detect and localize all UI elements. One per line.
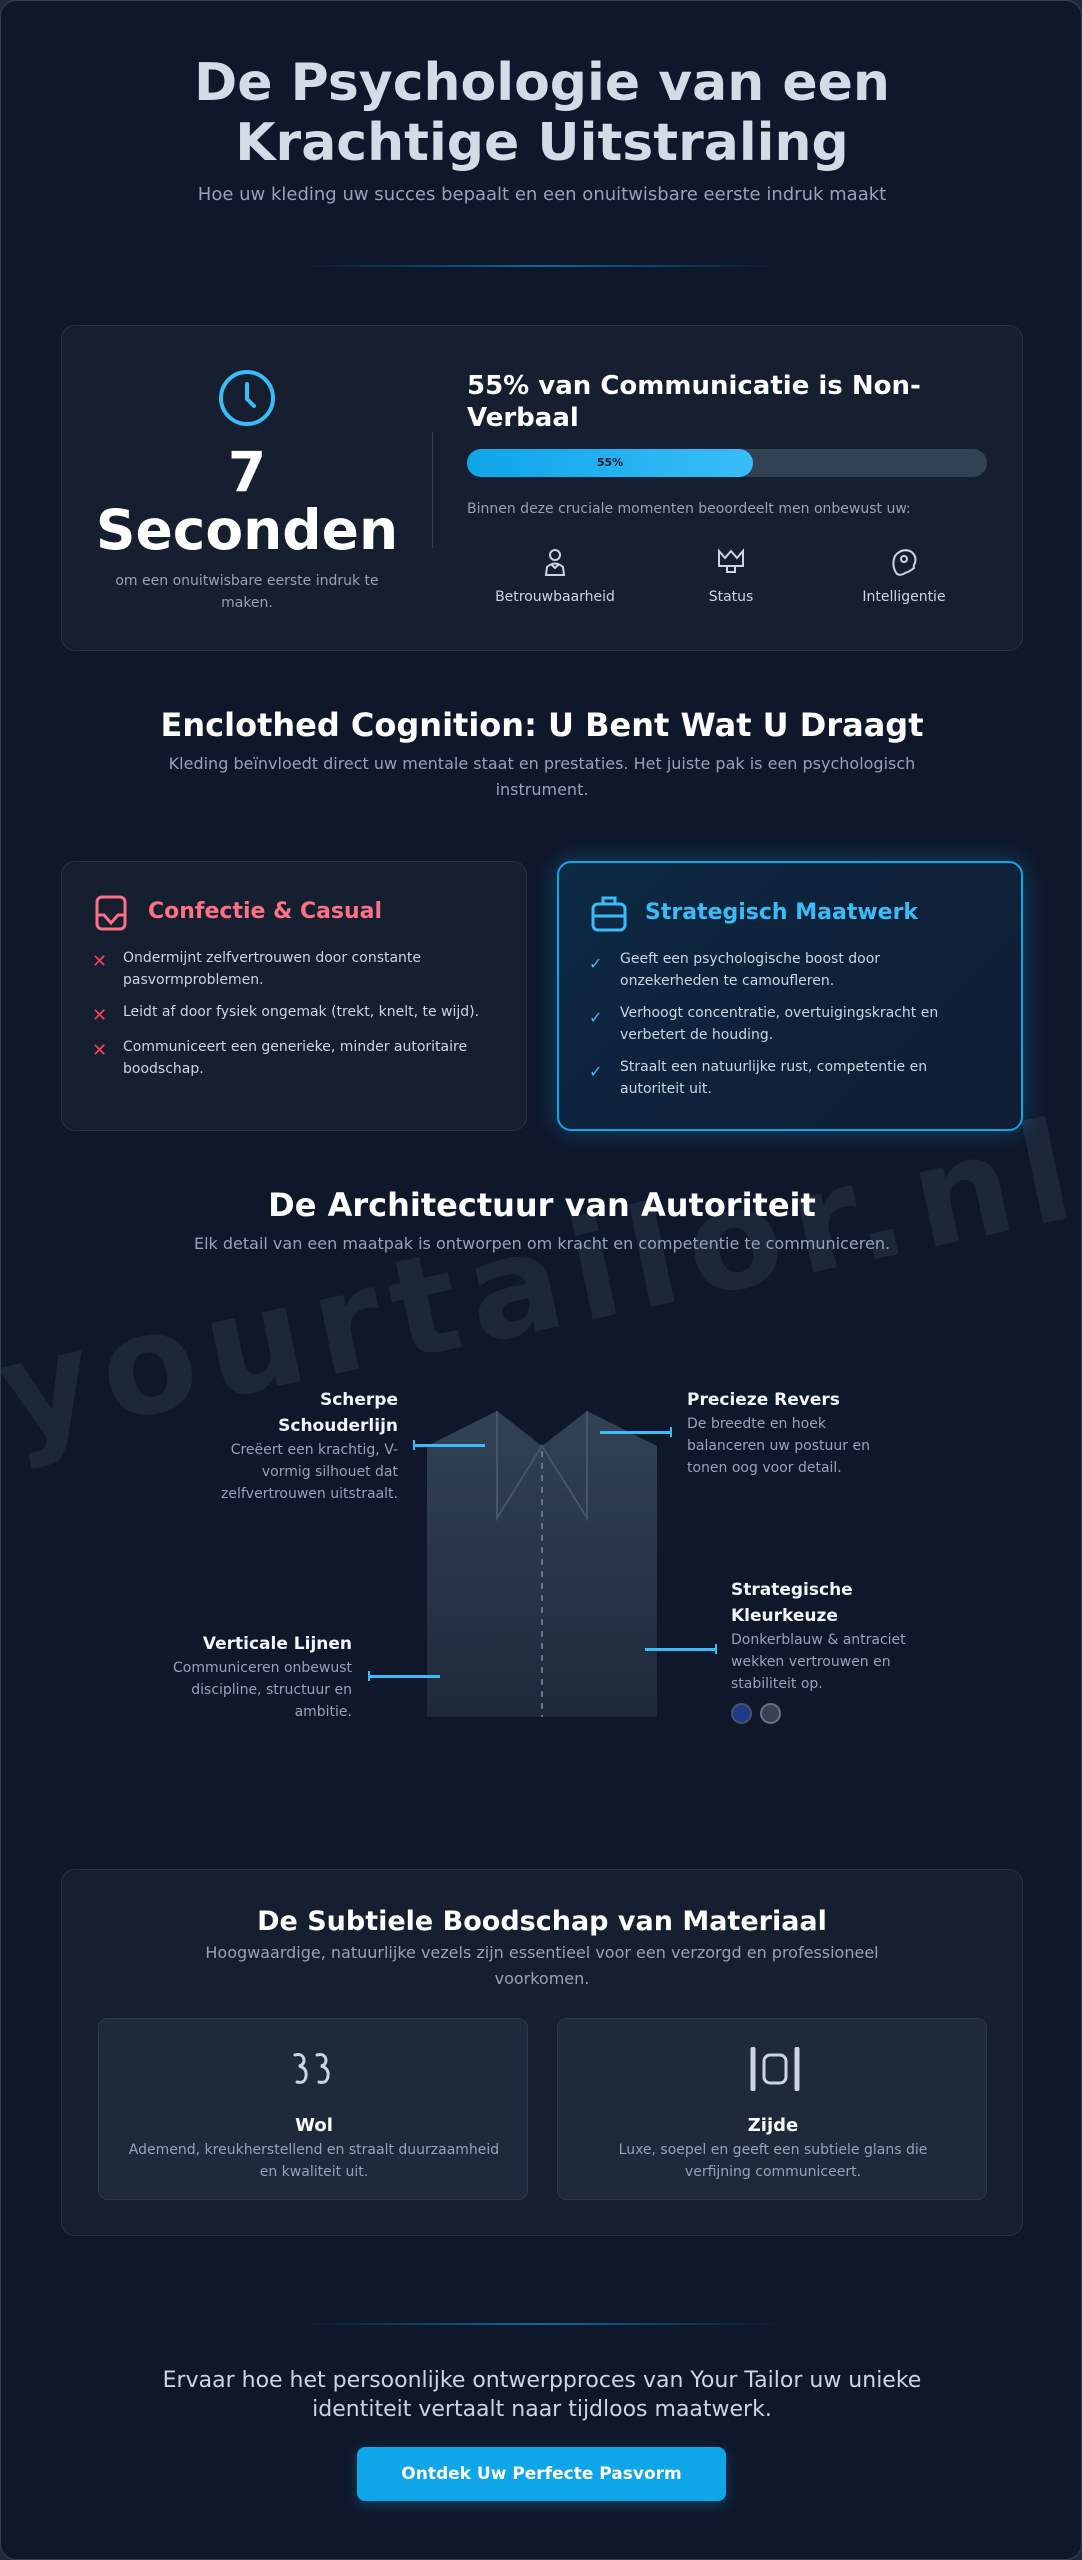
progress bar xyxy=(467,449,987,477)
card: wol: Ademend, kreukherstellend en straalt duurzaamheid xyxy=(129,2142,499,2158)
callout: verticale lijnen: Communiceren onbewust discipline, structuur en ambitie. xyxy=(173,1660,352,1720)
callout: schouderlijn: Creëert een krachtig, V-vormig silhouet dat zelfvertrouwen uitstraalt. xyxy=(221,1442,398,1502)
card title: Strategisch Maatwerk xyxy=(645,900,918,925)
icon group: traits: Betrouwbaarheid xyxy=(495,589,615,605)
color swatches xyxy=(731,1703,781,1724)
heading: architectuur: De Architectuur van Autoriteit xyxy=(268,1186,816,1224)
icon: wool xyxy=(294,2053,330,2084)
bullets: ✓ xyxy=(589,1062,602,1081)
callout: schouderlijn: Scherpe xyxy=(320,1390,398,1410)
title: De Psychologie van een xyxy=(194,53,890,113)
panel: first impression xyxy=(61,325,1023,651)
card: wol: Wol xyxy=(295,2115,333,2136)
text: enclothed subtitle: Kleding beïnvloedt direct uw mentale staat en prestaties. Het juiste pak is een psychologisch instrument. xyxy=(169,754,915,799)
callout: schouderlijn xyxy=(221,1390,398,1502)
caption: om een onuitwisbare eerste indruk te maken. xyxy=(115,573,379,611)
icon: briefcase xyxy=(592,896,626,932)
icon: trust xyxy=(544,549,566,576)
icon group: traits xyxy=(495,548,946,605)
callout: revers: Precieze Revers xyxy=(687,1390,840,1410)
callout: verticale lijnen xyxy=(173,1634,352,1720)
bullets: Straalt een natuurlijke rust, competentie en autoriteit uit. xyxy=(620,1059,927,1097)
progress bar: 55% xyxy=(597,456,623,469)
card: wol xyxy=(98,2018,528,2200)
stat: 7 seconden: 7 xyxy=(228,440,266,504)
icon: clock xyxy=(219,370,275,426)
subtitle: Hoe uw kleding uw succes bepaalt en een onuitwisbare eerste indruk maakt xyxy=(198,184,886,205)
bullets: ✓ xyxy=(589,1008,602,1027)
card: zijde: verfijning communiceert. xyxy=(685,2164,861,2180)
callout: schouderlijn: Schouderlijn xyxy=(278,1416,398,1436)
text: closing: Ervaar hoe het persoonlijke ontwerpproces van Your Tailor uw unieke identiteit vertaalt naar tijdloos maatwerk. xyxy=(163,2368,921,2422)
icon: tray xyxy=(96,896,126,930)
callout: verticale lijnen: Verticale Lijnen xyxy=(203,1634,352,1654)
callout: kleurkeuze: Strategische xyxy=(731,1580,853,1600)
icon: silk xyxy=(750,2047,800,2091)
stat: 7 seconden: Seconden xyxy=(96,498,398,562)
callout: kleurkeuze xyxy=(731,1580,906,1724)
bullets: ✓ xyxy=(589,954,602,973)
card: zijde xyxy=(557,2018,987,2200)
arrow: kleurkeuze xyxy=(645,1644,717,1654)
button: CTA xyxy=(357,2447,726,2501)
subtitle: Hoogwaardige, natuurlijke vezels zijn essentieel voor een verzorgd en professioneel voorkomen. xyxy=(205,1943,879,1988)
title: Krachtige Uitstraling xyxy=(235,113,849,173)
diagram: suit xyxy=(427,1411,657,1717)
labels xyxy=(495,589,946,605)
bullets xyxy=(589,951,938,1097)
bullets: Verhoogt concentratie, overtuigingskracht en verbetert de houding. xyxy=(620,1005,938,1043)
card title: Confectie & Casual xyxy=(148,899,382,924)
bullets: Communiceert een generieke, minder autoritaire boodschap. xyxy=(123,1039,467,1077)
callout: kleurkeuze: Donkerblauw & antraciet wekken vertrouwen en stabiliteit op. xyxy=(731,1632,906,1692)
title xyxy=(194,53,890,173)
card: zijde: Zijde xyxy=(748,2115,798,2136)
stat: 7 seconden xyxy=(96,440,398,562)
callout: revers xyxy=(687,1390,870,1476)
panel: materiaal xyxy=(61,1869,1023,2236)
arrow: revers xyxy=(600,1427,672,1437)
card: wol: en kwaliteit uit. xyxy=(260,2164,368,2180)
arrow: schouderlijn xyxy=(413,1440,485,1450)
bullets: ✕ xyxy=(92,1005,107,1026)
panel: maatwerk xyxy=(557,861,1023,1131)
text: architectuur subtitle: Elk detail van een maatpak is ontworpen om kracht en competentie te communiceren. xyxy=(194,1234,890,1253)
bullets xyxy=(92,950,479,1077)
bullets: ✕ xyxy=(92,1040,107,1061)
bullets: Geeft een psychologische boost door onzekerheden te camoufleren. xyxy=(620,951,880,989)
heading: enclothed cognition: Enclothed Cognition: U Bent Wat U Draagt xyxy=(161,706,923,744)
callout: kleurkeuze: Kleurkeuze xyxy=(731,1606,838,1626)
heading: 55%: 55% van Communicatie is Non-Verbaal xyxy=(467,371,921,433)
icon: intelligence xyxy=(892,549,916,576)
card: zijde: Luxe, soepel en geeft een subtiele glans die xyxy=(619,2142,927,2158)
icon group: traits: Status xyxy=(709,589,753,605)
button: CTA: Ontdek Uw Perfecte Pasvorm xyxy=(401,2464,682,2484)
arrow: verticale lijnen xyxy=(368,1671,440,1681)
bullets: Leidt af door fysiek ongemak (trekt, knelt, te wijd). xyxy=(123,1004,479,1020)
heading: De Subtiele Boodschap van Materiaal xyxy=(257,1906,827,1937)
watermark: yourtailor.nl xyxy=(0,1088,1082,1475)
bullets: Ondermijnt zelfvertrouwen door constante pasvormproblemen. xyxy=(123,950,421,988)
text: judged: Binnen deze cruciale momenten beoordeelt men onbewust uw: xyxy=(467,501,911,517)
callout: revers: De breedte en hoek balanceren uw postuur en tonen oog voor detail. xyxy=(687,1416,870,1476)
panel: confectie xyxy=(61,861,527,1131)
icon group: traits: Intelligentie xyxy=(862,589,946,605)
bullets: ✕ xyxy=(92,951,107,972)
icon: status xyxy=(718,548,744,573)
